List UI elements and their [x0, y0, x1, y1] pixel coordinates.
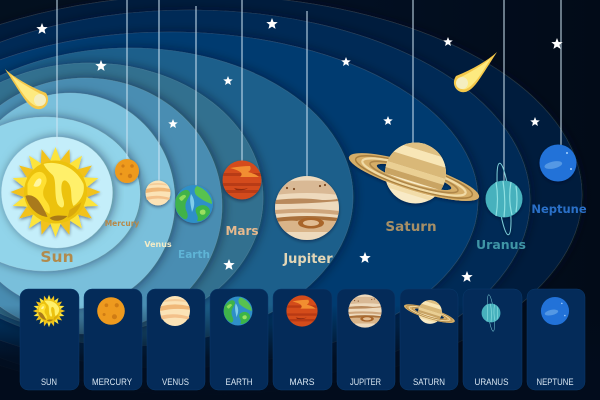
- legend cards: [20, 289, 585, 390]
- planet name labels: Saturn: [385, 219, 437, 235]
- planet name labels: [40, 202, 587, 267]
- planet name labels: Jupiter: [282, 252, 333, 267]
- planet: mars: [222, 160, 262, 200]
- planet name labels: Mars: [225, 224, 259, 238]
- legend labels: MERCURY: [92, 377, 132, 387]
- legend labels: SATURN: [413, 377, 445, 387]
- planet: neptune: [540, 144, 576, 182]
- hanging strings: [57, 0, 561, 186]
- planet: sun: [10, 147, 101, 237]
- stars: [36, 18, 563, 282]
- planet: uranus: [486, 163, 522, 235]
- legend labels: NEPTUNE: [536, 377, 574, 387]
- comet left: [5, 69, 48, 109]
- planet name labels: Earth: [178, 249, 210, 261]
- planet: venus: [146, 180, 170, 206]
- planet: saturn: [345, 131, 483, 210]
- planet: earth: [175, 185, 213, 223]
- legend labels: EARTH: [226, 377, 252, 387]
- planet name labels: Neptune: [531, 202, 587, 216]
- legend labels: [41, 377, 574, 387]
- planet name labels: Mercury: [105, 219, 139, 228]
- legend labels: URANUS: [474, 377, 508, 387]
- planet name labels: Venus: [144, 240, 172, 249]
- legend labels: MARS: [290, 377, 314, 387]
- legend labels: VENUS: [162, 377, 189, 387]
- legend labels: JUPITER: [350, 377, 381, 387]
- planet name labels: Sun: [40, 248, 74, 266]
- legend icons: [33, 294, 569, 332]
- comet right: [454, 52, 497, 92]
- planet name labels: Uranus: [476, 237, 526, 252]
- planet: mercury: [115, 159, 139, 183]
- planet: jupiter: [275, 176, 339, 240]
- legend labels: SUN: [41, 377, 57, 387]
